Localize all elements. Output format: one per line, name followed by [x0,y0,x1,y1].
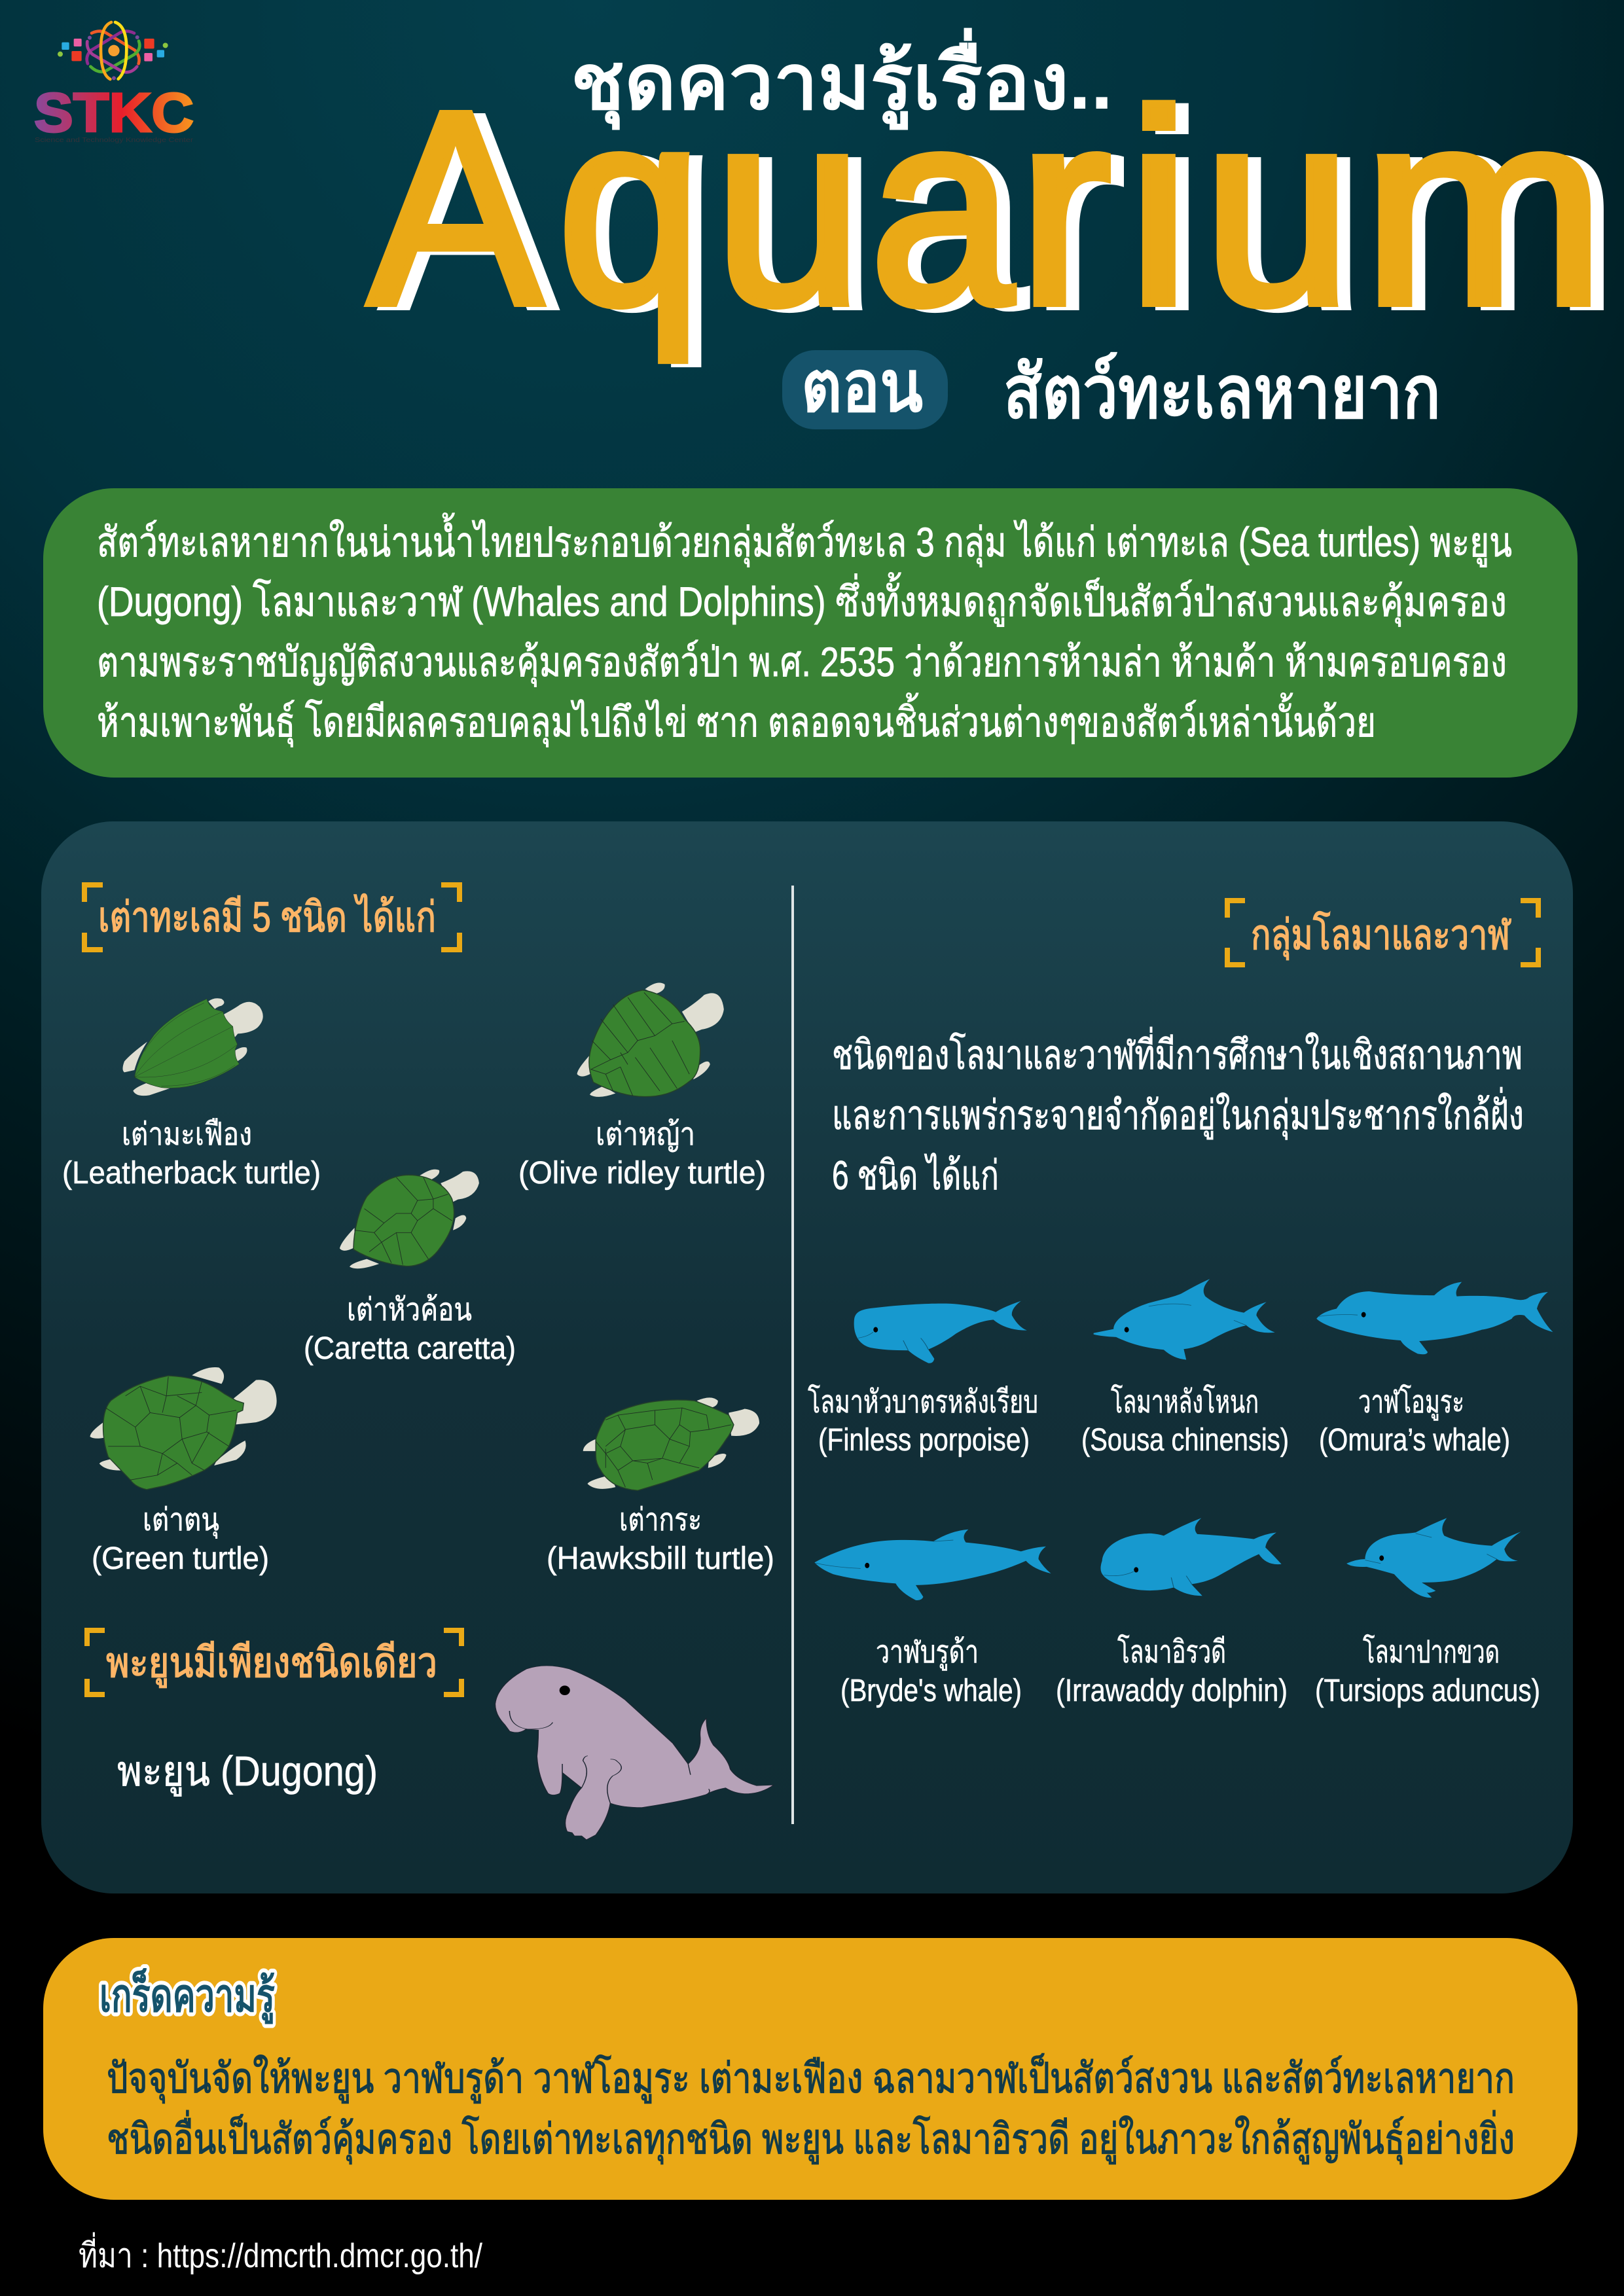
label: green: เต่าตนุ [143,1503,219,1539]
text block: dolphin and whale description: 6 ชนิด ได้แก่ [832,1153,999,1198]
panel: knowledge nugget [43,1938,1578,2200]
label: omura's whale: วาฬโอมูระ [1358,1384,1464,1421]
label: caretta caretta [304,1293,516,1366]
turtle: green [90,1367,277,1576]
label: olive ridley: เต่าหญ้า [596,1117,695,1152]
label: irrawaddy dolphin: โลมาอิรวดี [1117,1634,1226,1670]
title: Aquarium: a [870,55,1015,362]
icon: hawksbill turtle [583,1397,759,1490]
title: Aquarium: q [558,55,702,363]
label: sousa chinensis: (Sousa chinensis) [1081,1423,1289,1458]
label: finless porpoise [808,1384,1038,1458]
label: irrawaddy dolphin [1056,1634,1288,1708]
icon: olive ridley turtle [577,983,724,1097]
divider line [791,886,794,1824]
label: irrawaddy dolphin: (Irrawaddy dolphin) [1056,1674,1288,1708]
title: Aquarium: m [1375,58,1619,365]
label: sousa chinensis [1081,1384,1289,1458]
icon: leatherback turtle [122,998,263,1096]
icon: dugong [495,1666,774,1840]
turtle: hawksbill [547,1397,774,1576]
heading: เกร็ดความรู้: เกร็ดความรู้ [99,1967,275,2024]
icon: humpback dolphin [1094,1279,1275,1360]
label: hawksbill: เต่ากระ [619,1503,702,1537]
title: Aquarium [369,55,1619,367]
icon: bryde's whale [814,1530,1051,1600]
label: omura's whale [1319,1384,1510,1458]
heading: ชุดความรู้เรื่อง: ชุดความรู้เรื่อง.. [571,28,1113,130]
panel: introduction [43,488,1578,778]
icon: loggerhead turtle [340,1170,479,1268]
label: green [92,1503,269,1576]
title: Aquarium: u [727,58,876,365]
source: ที่มา : https://dmcrth.dmcr.go.th/ [79,2232,482,2275]
title: Aquarium: u [714,55,863,362]
subtitle: สัตว์ทะเลหายาก: สัตว์ทะเลหายาก [1003,351,1441,433]
title: Aquarium: q [571,58,715,367]
title: Aquarium: A [382,58,556,365]
label: green: (Green turtle) [92,1541,269,1576]
heading: dugong: พะยูนมีเพียงชนิดเดียว [106,1639,437,1688]
label: bryde's whale: (Bryde's whale) [840,1674,1022,1708]
icon: omura's whale [1316,1282,1553,1354]
turtle: caretta caretta [304,1170,516,1366]
label: finless porpoise: (Finless porpoise) [818,1423,1030,1458]
heading: sea turtles: เต่าทะเลมี 5 ชนิด ได้แก่ [98,893,436,941]
label: leatherback [62,1117,321,1191]
whale: finless porpoise [808,1301,1038,1458]
label: olive ridley: (Olive ridley turtle) [518,1156,766,1191]
turtle: olive ridley [518,983,766,1191]
title: Aquarium: m [1362,55,1606,362]
turtle: leatherback [62,998,321,1191]
label: olive ridley [518,1117,766,1191]
logo: STKC [34,22,194,144]
text block: knowledge nugget [107,2054,1515,2164]
panel: species [41,821,1573,1893]
heading: dolphins and whales [1227,901,1538,965]
text block: dolphin and whale description [832,1027,1524,1198]
label: tursiops aduncus: (Tursiops aduncus) [1315,1674,1540,1708]
title: Aquarium: a [883,58,1028,365]
label: hawksbill: (Hawksbill turtle) [547,1541,774,1576]
title: Aquarium: r [1031,58,1125,365]
icon: atom emblem [58,22,168,80]
label: leatherback: (Leatherback turtle) [62,1156,321,1191]
title: Aquarium: A [369,55,543,362]
label: omura's whale: (Omura’s whale) [1319,1423,1510,1458]
whale: omura's whale [1316,1282,1553,1458]
logo wordmark: STKC [34,82,194,143]
title: Aquarium: u [1203,55,1352,362]
whale: tursiops aduncus [1315,1518,1540,1708]
label: leatherback: เต่ามะเฟือง [122,1117,252,1152]
text block: introduction [97,512,1512,747]
label: sousa chinensis: โลมาหลังโหนก [1111,1384,1259,1420]
whale: irrawaddy dolphin [1056,1518,1288,1708]
title: Aquarium: r [1018,55,1111,362]
whale: sousa chinensis [1081,1279,1289,1458]
icon: irrawaddy dolphin [1100,1518,1282,1596]
label: hawksbill [547,1503,774,1576]
subtitle pill: ตอน: ตอน [801,346,923,427]
logo tagline: Science and Technology Knowledge Center [35,137,194,144]
label: caretta caretta: เต่าหัวค้อน [347,1293,472,1327]
icon: bottlenose dolphin [1346,1518,1521,1598]
label: dugong: พะยูน (Dugong) [117,1748,378,1797]
label: finless porpoise: โลมาหัวบาตรหลังเรียบ [808,1384,1038,1420]
label: tursiops aduncus [1315,1634,1540,1708]
title: Aquarium: i [1140,58,1204,365]
title: Aquarium: i [1127,55,1191,362]
icon: finless porpoise [854,1301,1027,1363]
icon: green turtle [90,1367,277,1490]
heading: sea turtles [84,885,460,950]
label: caretta caretta: (Caretta caretta) [304,1331,516,1366]
label: bryde's whale [840,1635,1022,1708]
heading: dolphins and whales: กลุ่มโลมาและวาฬ [1251,911,1511,960]
heading: dugong [87,1630,461,1695]
label: bryde's whale: วาฬบรูด้า [876,1635,979,1671]
whale: bryde's whale [814,1530,1051,1708]
label: tursiops aduncus: โลมาปากขวด [1363,1634,1500,1670]
title: Aquarium: u [1216,58,1365,365]
